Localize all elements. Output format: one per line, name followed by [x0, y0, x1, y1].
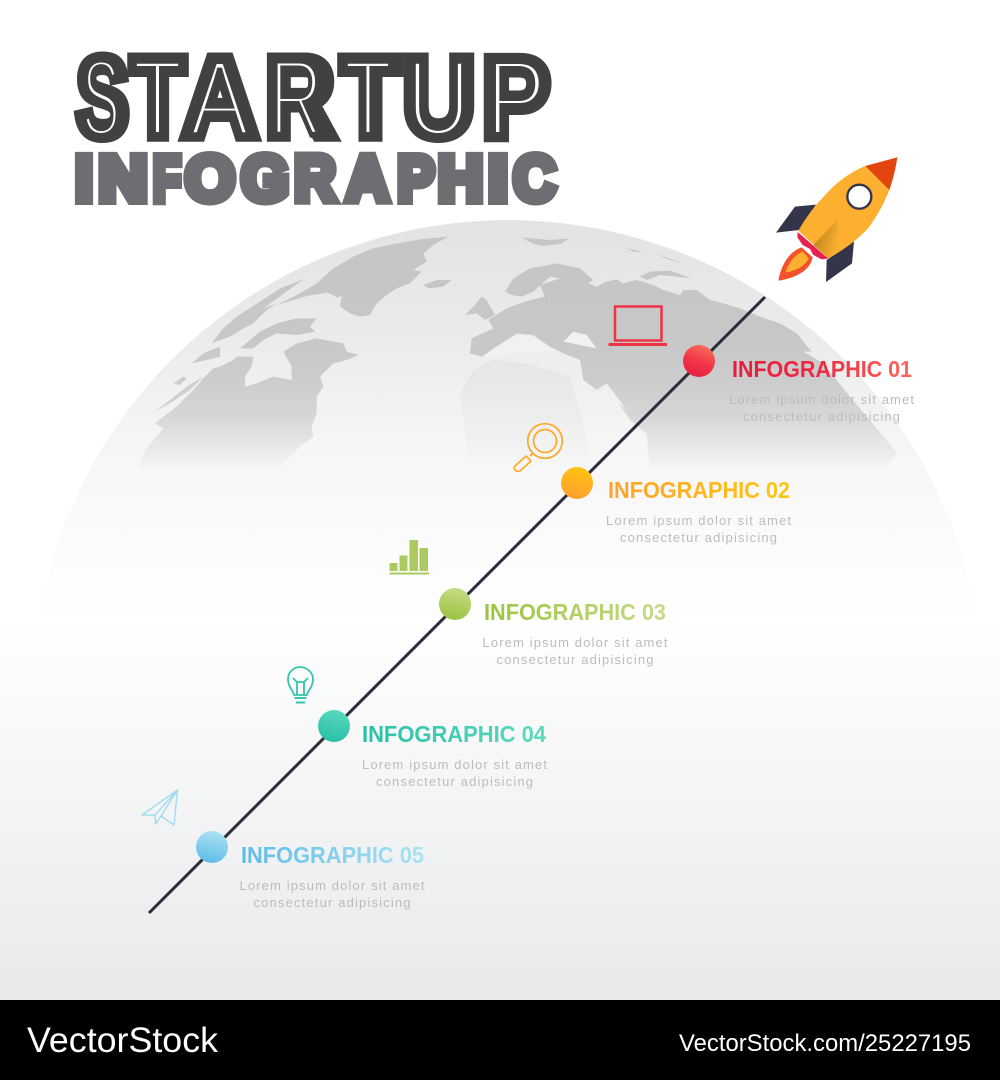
- step 04 description: Lorem ipsum dolor sit amet: [362, 757, 547, 772]
- step 01: [683, 345, 914, 424]
- title: INFOGRAPHIC: F: [153, 143, 181, 214]
- step 04 node: [318, 710, 350, 742]
- step 02 heading: INFOGRAPHIC 02: [608, 477, 790, 503]
- title: STARTUP inline: P: [486, 38, 546, 159]
- rocket exhaust: [797, 232, 828, 259]
- title: STARTUP: U: [403, 36, 475, 160]
- step 05 description: Lorem ipsum dolor sit amet: [240, 878, 425, 893]
- step 01 heading: INFOGRAPHIC 01: [732, 356, 912, 382]
- title: INFOGRAPHIC: P: [397, 143, 435, 214]
- step 02: [561, 467, 791, 545]
- title: STARTUP inline: R: [269, 37, 323, 158]
- rocket: [776, 157, 897, 282]
- footer bar: [0, 1000, 1000, 1080]
- title: INFOGRAPHIC: O: [185, 142, 235, 214]
- step 04 description: consectetur adipisicing: [376, 774, 533, 789]
- step 03 description: Lorem ipsum dolor sit amet: [482, 635, 668, 650]
- title: STARTUP inline: S: [82, 38, 120, 159]
- step 05 description: consectetur adipisicing: [254, 895, 410, 910]
- title: INFOGRAPHIC: [75, 142, 556, 215]
- rocket flame: [778, 247, 813, 281]
- rocket nose: [865, 157, 897, 190]
- step 04: [318, 710, 547, 789]
- title: STARTUP: T: [131, 36, 185, 160]
- footer url: VectorStock.com/25227195: [679, 1030, 971, 1057]
- title: STARTUP inline: [82, 37, 546, 159]
- title: STARTUP: T: [341, 36, 400, 161]
- title: STARTUP: P: [482, 35, 550, 160]
- step 02 description: Lorem ipsum dolor sit amet: [606, 513, 791, 528]
- map: eurasia and arctic islands: [460, 237, 897, 470]
- title: INFOGRAPHIC: H: [438, 144, 483, 215]
- title: INFOGRAPHIC: C: [513, 143, 556, 215]
- title: INFOGRAPHIC: I: [75, 142, 93, 214]
- step 04 heading: INFOGRAPHIC 04: [362, 721, 546, 747]
- step 03 description: consectetur adipisicing: [496, 652, 654, 667]
- title: STARTUP inline: T: [133, 39, 182, 159]
- timeline line: [149, 297, 765, 913]
- step 02 node: [561, 467, 593, 499]
- step 05 node: [196, 831, 228, 863]
- step 05: [196, 831, 425, 910]
- title: INFOGRAPHIC: A: [346, 144, 389, 215]
- icon: magnifier: [514, 424, 562, 471]
- title: INFOGRAPHIC: R: [294, 143, 336, 214]
- title: STARTUP inline: T: [344, 38, 392, 159]
- title: STARTUP: R: [266, 36, 334, 161]
- step 03 heading: INFOGRAPHIC 03: [484, 599, 666, 625]
- rocket body: [798, 157, 897, 258]
- step 03 node: [439, 588, 471, 620]
- icon: light bulb: [288, 667, 313, 702]
- footer logo: VectorStock: [27, 1021, 219, 1060]
- rocket fins: [776, 205, 854, 282]
- map: inland seas: [492, 332, 626, 410]
- title: STARTUP: [76, 35, 550, 161]
- step 01 node: [683, 345, 715, 377]
- step 02 description: consectetur adipisicing: [620, 530, 777, 545]
- title: INFOGRAPHIC: I: [488, 143, 508, 215]
- rocket window: [847, 185, 871, 209]
- icon: paper plane: [142, 790, 178, 825]
- map: africa: [535, 366, 542, 368]
- title: INFOGRAPHIC: G: [241, 143, 289, 215]
- step 01 description: consectetur adipisicing: [743, 409, 900, 424]
- title: STARTUP inline: U: [407, 38, 470, 158]
- title: STARTUP inline: A: [190, 38, 249, 159]
- step 01 description: Lorem ipsum dolor sit amet: [729, 392, 914, 407]
- map: north america and greenland: [138, 237, 452, 470]
- rocket body shadow: [813, 220, 841, 258]
- icon: bar chart: [390, 540, 429, 574]
- step 03: [439, 588, 668, 667]
- step 05 heading: INFOGRAPHIC 05: [241, 842, 424, 868]
- icon: laptop: [609, 306, 666, 346]
- title: STARTUP: S: [76, 35, 129, 160]
- title: INFOGRAPHIC: N: [99, 142, 147, 214]
- globe with world map: [94, 220, 922, 470]
- title: STARTUP: A: [183, 35, 257, 160]
